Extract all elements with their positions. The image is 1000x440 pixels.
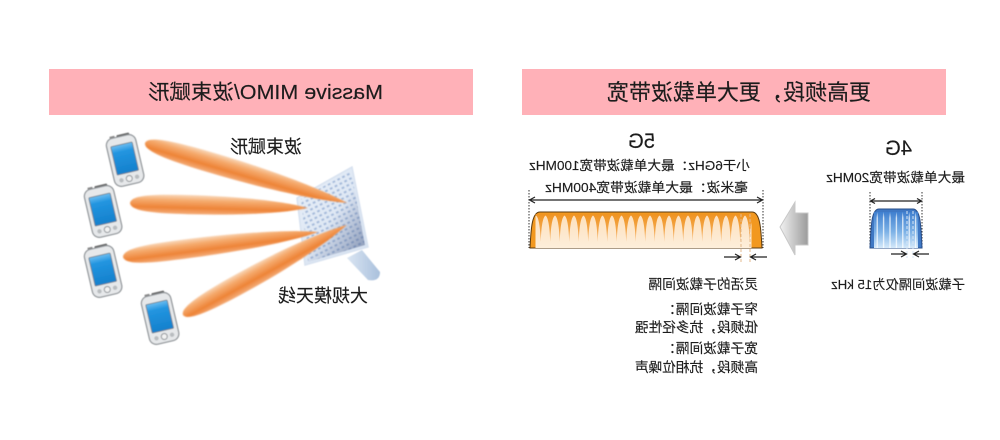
text: narrow subcarrier spacing xyxy=(634,301,758,335)
text: flexible subcarrier spacing: 灵活的子载波间隔 xyxy=(648,277,758,292)
heading: 4G: 4G xyxy=(885,137,912,160)
beam 3 xyxy=(122,222,320,266)
arrows: flexible spacing xyxy=(724,254,767,260)
text: below 6GHz: 小于6GHz：最大单载波带宽100MHz xyxy=(529,158,750,173)
text: narrow subcarrier spacing: 低频段，抗多径性强 xyxy=(634,319,758,335)
icon: phone 4 xyxy=(140,289,180,346)
text: flexible subcarrier spacing xyxy=(634,277,758,375)
heading bar: higher band: 更高频段，更大单载波带宽 xyxy=(607,80,871,105)
text: subcarrier spacing 15 kHz: 子载波间隔仅为15 kHz xyxy=(831,277,965,292)
heading bar: Massive MIMO: Massive MIMO/波束赋形 xyxy=(148,81,383,104)
panel: Massive MIMO xyxy=(49,69,473,346)
text: mmWave: 毫米波：最大单载波带宽400MHz xyxy=(545,180,748,195)
text: wide subcarrier spacing: 高频段，抗相位噪声 xyxy=(635,359,758,375)
beam 1 xyxy=(142,133,350,213)
label: massive antenna: 大规模天线 xyxy=(278,286,368,306)
beam 2 xyxy=(130,193,308,218)
text: wide subcarrier spacing xyxy=(635,340,758,375)
heading bar: higher band xyxy=(522,69,946,115)
arrows: 15 kHz spacing xyxy=(891,251,929,257)
panel: higher band, larger bandwidth xyxy=(522,69,965,375)
beam 4 xyxy=(178,216,352,324)
heading: 5G: 5G xyxy=(628,130,655,153)
icon: antenna array xyxy=(297,167,380,280)
icon: phone 2 xyxy=(83,182,123,239)
text: wide subcarrier spacing: 宽子载波间隔： xyxy=(662,340,758,356)
chart: 4G spectrum xyxy=(870,192,922,258)
heading bar: Massive MIMO xyxy=(49,69,473,115)
arrow: 4G to 5G xyxy=(780,202,808,255)
label: beamforming: 波束赋形 xyxy=(230,137,302,157)
icon: phone 3 xyxy=(83,242,123,299)
text: narrow subcarrier spacing: 窄子载波间隔： xyxy=(662,301,758,317)
text: max bandwidth 20MHz: 最大单载波带宽20MHz xyxy=(826,170,965,185)
icon: phone 1 xyxy=(105,131,145,188)
chart: 5G spectrum xyxy=(529,190,763,262)
